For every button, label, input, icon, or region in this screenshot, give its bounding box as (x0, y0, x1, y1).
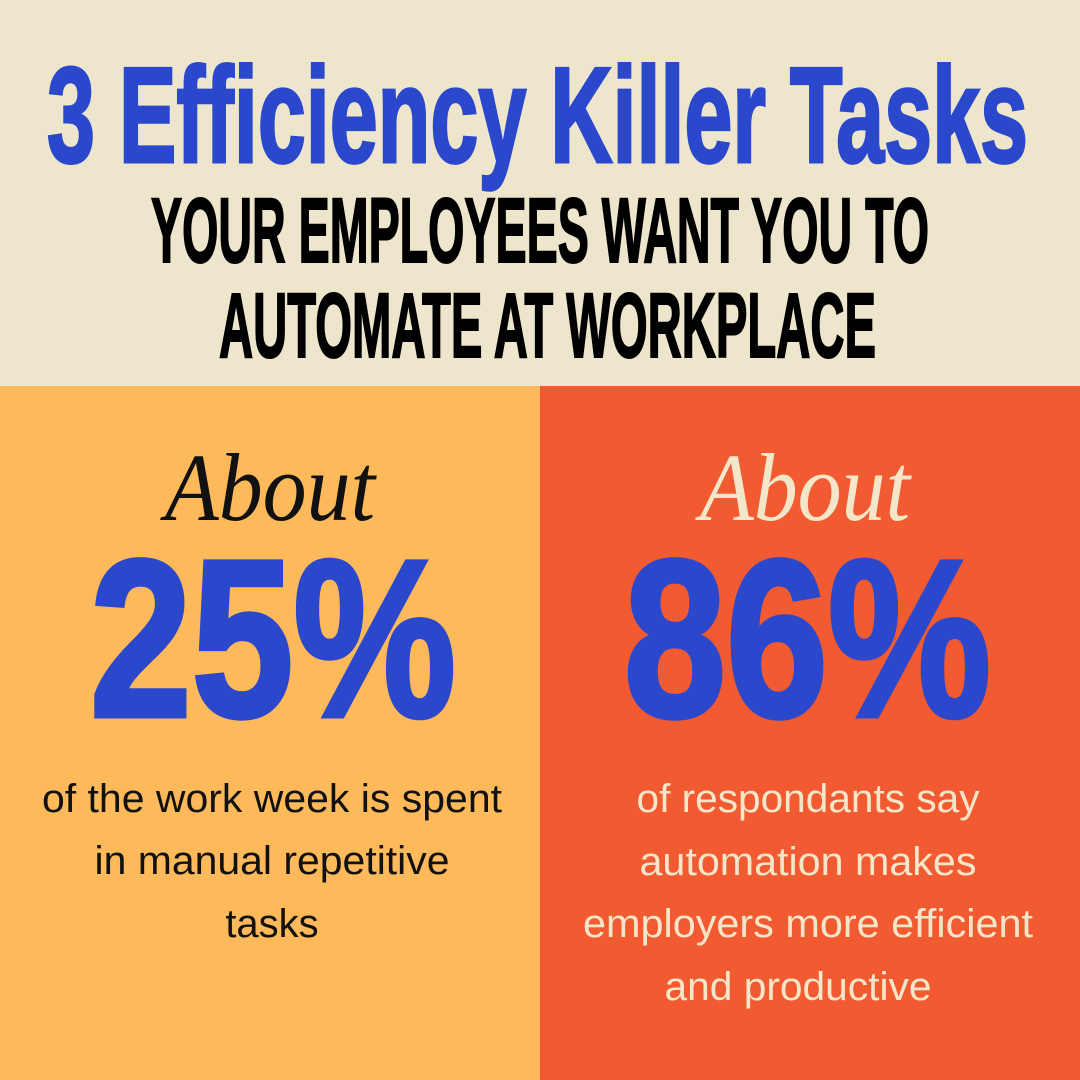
subtitle (151, 180, 929, 377)
right about: About (695, 434, 912, 541)
header band (0, 0, 1080, 386)
panel: right stat (540, 386, 1080, 1080)
left description: in manual repetitive (94, 839, 450, 883)
left percentage: 25% (90, 514, 456, 764)
right description: of respondants say (636, 777, 980, 821)
left description: of the work week is spent (42, 777, 502, 821)
left about: About (160, 434, 377, 541)
right percentage: 86% (624, 514, 991, 764)
right description: and productive (664, 965, 932, 1009)
panel: left stat (0, 386, 540, 1080)
left description (42, 777, 502, 946)
right description (583, 777, 1033, 1009)
right description: employers more efficient (583, 902, 1033, 946)
left description: tasks (225, 902, 319, 946)
right description: automation makes (640, 840, 976, 884)
